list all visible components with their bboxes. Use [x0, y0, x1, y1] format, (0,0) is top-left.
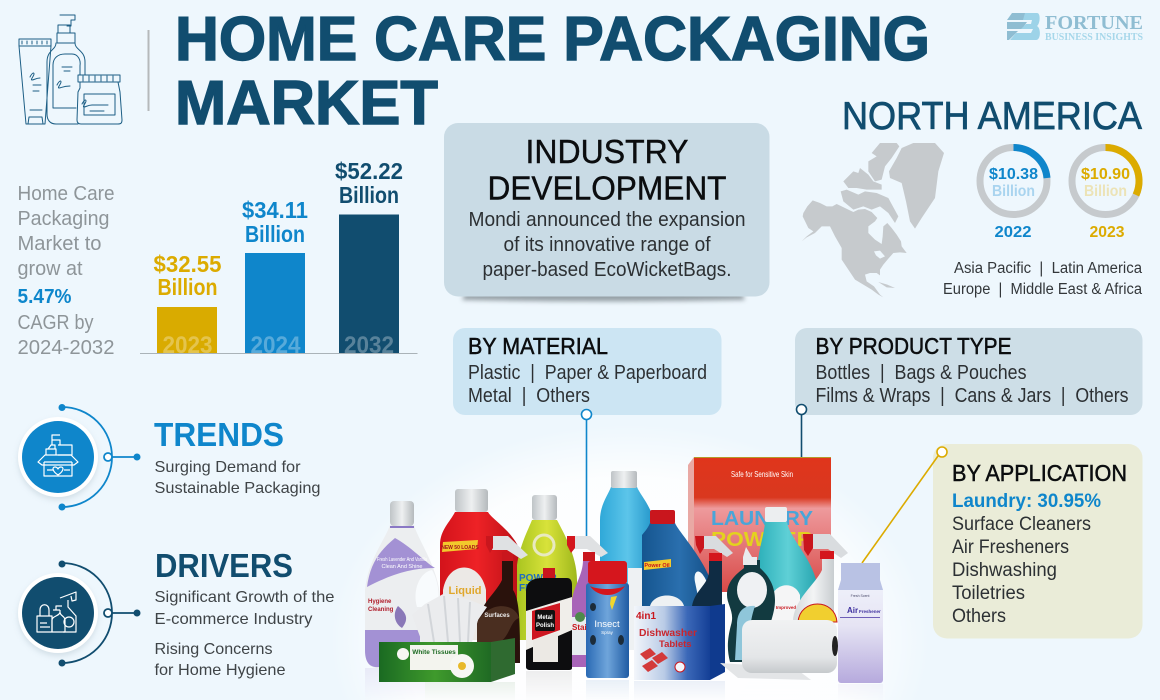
bar: 2023 [154, 251, 222, 359]
product: purple spray bottle: Stain [572, 623, 592, 632]
text: development description [468, 209, 746, 281]
text: drivers description: Rising Concerns [154, 641, 272, 658]
product: tissue box: White Tissues [412, 649, 456, 656]
chart: ring 2022: 2022 [994, 224, 1032, 241]
title [175, 5, 930, 138]
chart: ring 2023: 2023 [1090, 224, 1125, 241]
heading: by product type: BY PRODUCT TYPE [816, 333, 1012, 359]
product: dishwasher tablets box: 4in1 [636, 611, 656, 622]
product: metal polish [526, 568, 572, 670]
product: dark bottle with spray [692, 536, 733, 606]
bar: 2024: $34.11 [242, 197, 308, 223]
text: application segments: Others [952, 606, 1006, 627]
bar: 2024 [242, 197, 308, 359]
text: material segments: Plastic | Paper & Paperboard [468, 362, 707, 384]
title: MARKET [175, 69, 438, 138]
floor reflections [365, 668, 885, 700]
text: other regions: Asia Pacific | Latin America [954, 260, 1142, 277]
product: dark blue bottle [642, 510, 717, 610]
product: tissues [379, 593, 515, 682]
text: application segments: Air Fresheners [952, 537, 1069, 558]
bar chart: market size [140, 158, 418, 359]
text: other regions [943, 260, 1142, 298]
bar: 2023: Billion [158, 274, 218, 300]
heading: drivers: DRIVERS [155, 547, 293, 584]
text: product type segments: Bottles | Bags & Pouches [816, 362, 1026, 384]
text block: market growth CAGR: 2024-2032 [18, 337, 115, 359]
product: air freshener can: Air [847, 606, 858, 615]
panel: industry development [444, 123, 770, 302]
product: surfaces spray bottle [477, 536, 528, 663]
text: laundry share: Laundry: 30.95% [952, 491, 1101, 512]
text: application segments [952, 514, 1091, 627]
panel: by application [933, 444, 1142, 638]
chart: ring 2022: Billion [992, 183, 1035, 200]
icon: trends circle [18, 404, 140, 510]
bar: 2032: $52.22 [335, 158, 403, 184]
text block: market growth CAGR: CAGR by [18, 312, 94, 334]
text: trends description [154, 459, 320, 497]
logo: Fortune Business Insights: BUSINESS INSIGHTS [1045, 32, 1143, 43]
chart: ring 2023 [1072, 147, 1139, 241]
text: material segments [468, 362, 707, 407]
heading: industry development: INDUSTRY [526, 134, 688, 171]
text block: market growth CAGR: grow at [18, 258, 83, 280]
product: laundry powder box: POWDER [711, 529, 814, 551]
product: yellow bottle [517, 495, 577, 640]
bar: 2024: Billion [245, 221, 305, 247]
product: dishwasher tablets box: Tablets [659, 639, 692, 650]
text block: market growth CAGR [18, 183, 115, 359]
text: application segments: Surface Cleaners [952, 514, 1091, 535]
map: north america [802, 143, 944, 297]
product: yellow bottle: FRESH [519, 583, 553, 594]
product: red bottle [440, 489, 522, 640]
product: surfaces spray bottle: Surfaces [484, 613, 510, 619]
text: product type segments: Films & Wraps | Cans & Jars | Others [816, 385, 1128, 407]
bar: 2023: $32.55 [154, 251, 222, 277]
bar: 2032: Billion [339, 182, 399, 208]
heading: industry development: DEVELOPMENT [488, 170, 726, 208]
product: red bottle: Liquid [448, 585, 482, 597]
product: insect spray can: Spray [601, 630, 614, 635]
product: lavender bottle: Fresh Lavender And Vanilla [377, 557, 427, 563]
text: development description: of its innovative range of [504, 234, 711, 256]
product: white spray bottle [793, 534, 848, 622]
product: laundry powder box: Safe for Sensitive Skin [731, 469, 793, 479]
text: drivers description: Significant Growth of the [154, 589, 335, 606]
bar: 2032 [335, 158, 403, 359]
panel: drivers [18, 547, 335, 679]
product: paper towel roll [720, 620, 838, 680]
product: air freshener can: Freshener [859, 609, 881, 614]
product: insect spray can: Insect [594, 619, 620, 630]
text: drivers description: for Home Hygiene [154, 662, 286, 679]
product: dish soap bottle [727, 547, 775, 662]
product: dishwasher tablets box: Dishwasher [639, 628, 697, 639]
text: drivers description: E-commerce Industry [154, 611, 312, 628]
icon: drivers circle [18, 560, 140, 666]
panel: north america [802, 95, 1142, 298]
panel: trends [18, 404, 320, 510]
text: material segments: Metal | Others [468, 385, 590, 407]
panel: by material [453, 328, 722, 415]
bar: 2023: 2023 [162, 332, 212, 359]
icon: cosmetic packaging line art [19, 15, 122, 124]
product: lavender bottle: Hygiene [368, 599, 392, 605]
product: dark blue bottle: Power Oil [644, 563, 670, 569]
text: trends description: Sustainable Packaging [154, 480, 320, 497]
product: lavender bottle: Clean And Shine [382, 564, 422, 570]
bar: 2024: 2024 [250, 332, 301, 359]
heading: north america: NORTH AMERICA [842, 95, 1142, 138]
text: development description: Mondi announced the expansion [468, 209, 746, 231]
text block: market growth CAGR: Market to [18, 233, 102, 255]
text: application segments: Dishwashing [952, 560, 1057, 581]
heading: industry development [488, 134, 726, 208]
chart: ring 2022 [980, 147, 1047, 241]
text: other regions: Europe | Middle East & Africa [943, 281, 1142, 298]
chart: ring 2023: $10.90 [1081, 166, 1130, 183]
product: lavender bottle: Cleaning [368, 607, 394, 613]
text: product type segments [816, 362, 1128, 407]
product: dishwasher tablets box [634, 604, 725, 680]
illustration: home care products [365, 457, 885, 700]
text block: market growth CAGR: Packaging [18, 208, 110, 230]
text: drivers description [154, 589, 335, 679]
product: yellow bottle: POWER [519, 573, 558, 584]
panel: by product type [795, 328, 1142, 415]
connector: material to products [582, 410, 592, 540]
product: lavender bottle [365, 501, 440, 668]
text: application segments: Toiletries [952, 583, 1025, 604]
product: light blue bottle [600, 471, 655, 650]
title: HOME CARE PACKAGING [175, 5, 930, 74]
product: metal polish: Polish [536, 623, 554, 629]
product: insect spray can [586, 561, 629, 678]
logo: Fortune Business Insights [1007, 12, 1143, 43]
bar: 2032: 2032 [344, 332, 394, 359]
logo: Fortune Business Insights: FORTUNE [1045, 12, 1143, 34]
product: red bottle: NEW 50 LOADS [441, 545, 479, 551]
text: development description: paper-based EcoWicketBags. [482, 259, 732, 281]
connector: product type to products [796, 404, 806, 458]
text block: market growth CAGR: Home Care [18, 183, 114, 205]
chart: ring 2023: Billion [1084, 183, 1127, 200]
product: purple spray bottle [567, 536, 608, 667]
product: laundry powder box [688, 457, 831, 592]
product: air freshener can [838, 563, 883, 683]
divider [148, 30, 150, 111]
connector: application to products [862, 447, 947, 563]
product: air freshener can: Fresh Scent [851, 594, 869, 598]
product: laundry powder box: LAUNDRY [711, 508, 814, 530]
heading: trends: TRENDS [154, 416, 284, 453]
product: teal bottle: Improved [776, 605, 796, 610]
heading: by material: BY MATERIAL [468, 333, 608, 359]
product: teal bottle [758, 507, 818, 620]
heading: by application: BY APPLICATION [952, 460, 1127, 486]
text block: market growth CAGR: 5.47% [18, 286, 72, 308]
product: metal polish: Metal [537, 615, 553, 621]
chart: ring 2022: $10.38 [989, 166, 1038, 183]
text: trends description: Surging Demand for [154, 459, 301, 476]
